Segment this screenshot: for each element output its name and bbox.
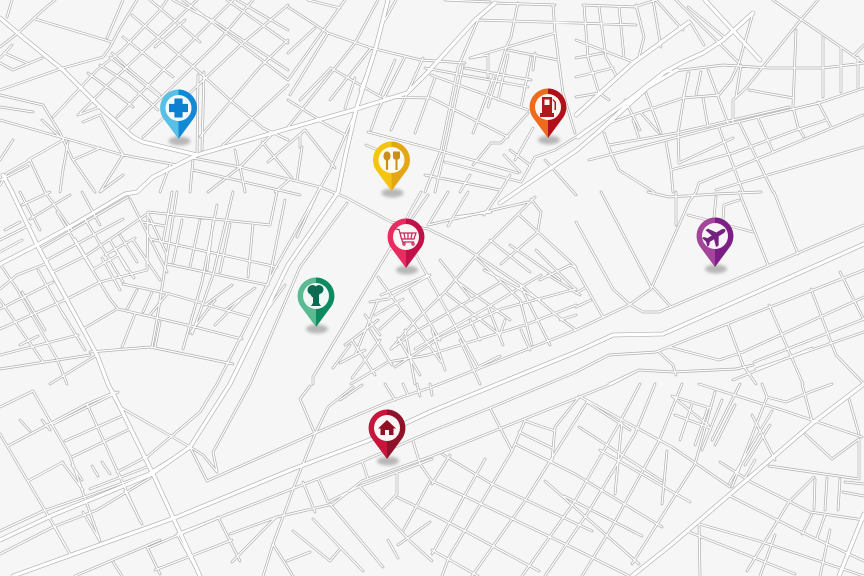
icon: plane (700, 221, 730, 251)
pin: airport (697, 218, 733, 274)
icon: fork and spoon (383, 151, 400, 170)
pin: home (369, 410, 405, 466)
pin: fuel station (530, 88, 566, 144)
icon: house (378, 420, 396, 435)
icon: cart (395, 229, 416, 245)
pin: park (298, 278, 334, 334)
icon: tree (308, 285, 324, 306)
pin: medical (160, 90, 197, 146)
pin: shopping (388, 218, 424, 274)
icon: cross (170, 99, 188, 117)
icon: fuel pump (540, 97, 556, 117)
pin: restaurant (373, 142, 410, 198)
